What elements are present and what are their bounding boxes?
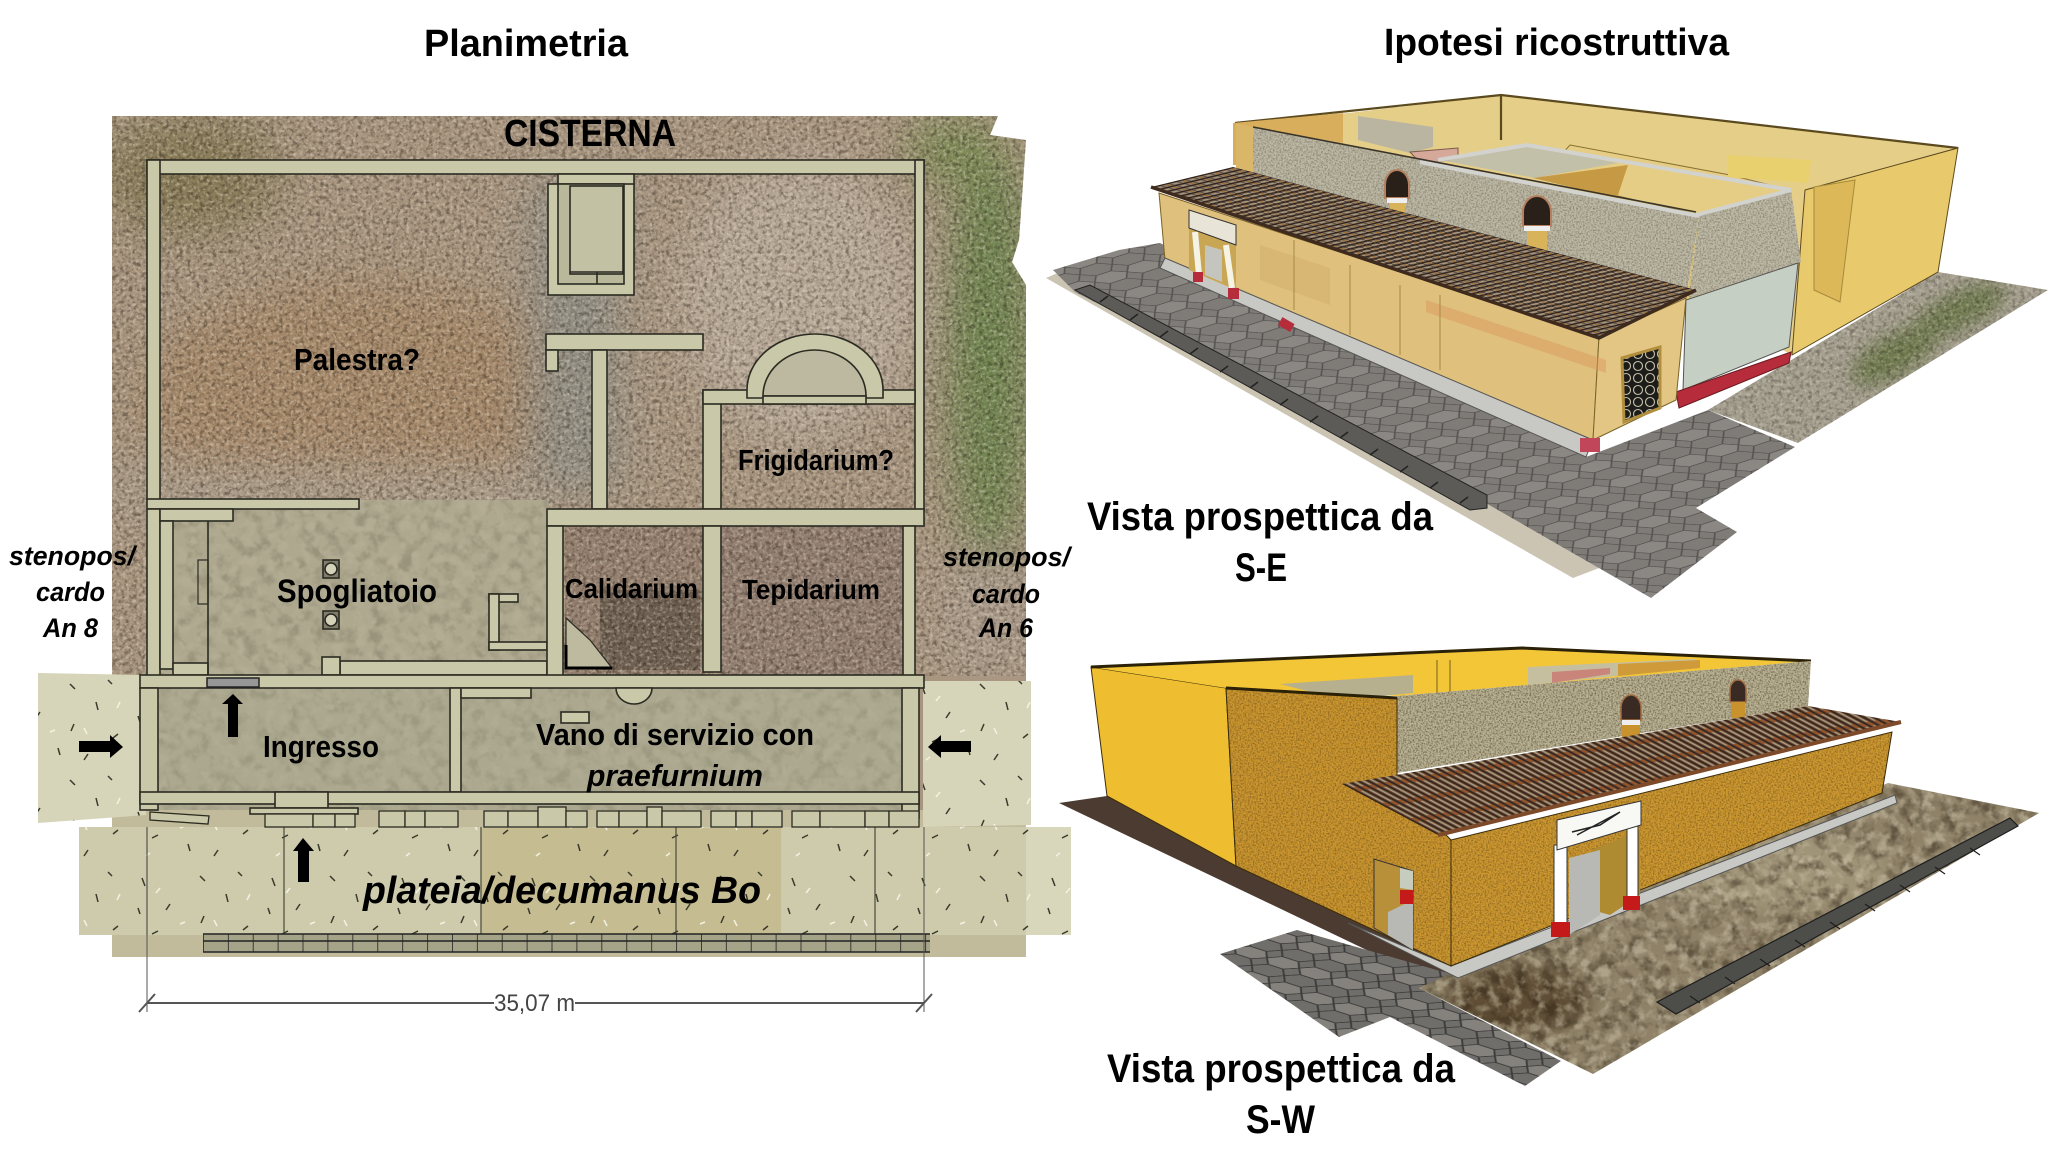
- label: Ingresso: Ingresso: [263, 729, 379, 764]
- ground photo: [1700, 270, 2048, 445]
- label: stenopos An 6: [943, 542, 1072, 643]
- label: Frigidarium: Frigidarium?: [738, 445, 894, 477]
- label: Vano di servizio: [536, 717, 814, 793]
- caption: view S-W: Vista prospettica da: [1107, 1047, 1456, 1091]
- windows: [1385, 170, 1551, 255]
- corner red base: [1580, 438, 1600, 452]
- frigidarium walls and apse: [703, 334, 915, 509]
- lattice window: [1622, 347, 1660, 422]
- central walls: [147, 499, 924, 679]
- washed lower rooms: [159, 689, 901, 810]
- grey stone walls: [1236, 123, 1801, 298]
- windows: [1621, 680, 1746, 737]
- label: stenopos An 8: stenopos/: [9, 541, 137, 571]
- main road paving: [1053, 243, 1590, 483]
- label: Calidarium: Calidarium: [565, 573, 698, 604]
- label: stenopos An 8: An 8: [42, 613, 98, 643]
- red plinth: [1676, 352, 1791, 408]
- base strip: [1160, 258, 1593, 457]
- rear stone wall: [1280, 675, 1413, 700]
- stenopos road right: [923, 681, 1031, 827]
- kerb: [1657, 818, 2018, 1014]
- threshold blocks: [150, 807, 919, 827]
- arrow: from right stenopos: [928, 735, 971, 758]
- kerb row: [203, 934, 930, 952]
- dimension label: 35,07 m: [494, 990, 575, 1017]
- lower block walls: [140, 675, 924, 818]
- road kerb: [1075, 285, 1487, 510]
- dark doorway threshold: [207, 678, 259, 687]
- tiled roof: [1151, 167, 1696, 338]
- label: stenopos An 6: An 6: [978, 613, 1034, 643]
- label: Vano di servizio: praefurnium: [586, 758, 763, 793]
- portal: [1189, 210, 1295, 332]
- label: CISTERNA: CISTERNA: [504, 113, 676, 155]
- dimension line: [139, 827, 932, 1012]
- spogliatoio pillars: [323, 560, 339, 629]
- plateia road: [79, 827, 1071, 935]
- building walls: [140, 160, 924, 827]
- label: Spogliatoio: Spogliatoio: [277, 573, 437, 609]
- arrow: from left stenopos: [79, 735, 123, 758]
- yellow interior wall: [1091, 648, 1811, 696]
- base strip: [1348, 795, 1897, 978]
- calidarium wall fragment: [566, 618, 612, 668]
- yellow outer wall: [1091, 667, 1236, 866]
- stenopos road left: [38, 673, 146, 823]
- arrow: entrance from plateia: [293, 838, 314, 882]
- side road paving: [1451, 410, 1795, 598]
- caption: view S-W: S-W: [1246, 1098, 1315, 1142]
- panel: site plan: [9, 113, 1072, 1017]
- side door: [1374, 859, 1413, 950]
- caption: view S-E: S-E: [1235, 546, 1287, 590]
- inner rooms: [1528, 659, 1700, 685]
- panel: perspective view from S-W: [1059, 648, 2045, 1086]
- heading: Ipotesi ricostruttiva: Ipotesi ricostruttiva: [1384, 22, 1730, 64]
- glass lower wall: [1683, 263, 1798, 390]
- dark earth strip: [1059, 796, 1458, 985]
- label: stenopos An 6: cardo: [972, 579, 1040, 609]
- facade yellow wall: [1159, 193, 1686, 440]
- washed spogliatoio: [147, 500, 547, 675]
- pavement shadow: [1046, 272, 1620, 578]
- aerial photo background: [100, 115, 1032, 957]
- label: Palestra: Palestra?: [294, 342, 420, 377]
- grey paving: [1220, 930, 1561, 1086]
- road photo texture: [1415, 780, 2045, 1080]
- label: plateia: plateia/decumanus Bo: [362, 870, 761, 912]
- label: stenopos An 8: cardo: [36, 577, 105, 607]
- caption: view S-E: [1087, 495, 1434, 590]
- label: Vano di servizio: Vano di servizio con: [536, 717, 814, 752]
- label: Tepidarium: Tepidarium: [742, 574, 880, 605]
- tiled roof: [1342, 706, 1901, 835]
- caption: view S-W: [1107, 1047, 1456, 1142]
- interior back walls: [1233, 95, 1958, 355]
- arrow: entrance from inner court: [222, 694, 243, 737]
- stone wall: [1397, 661, 1811, 773]
- caption: view S-E: Vista prospettica da: [1087, 495, 1434, 539]
- cistern basin: [548, 174, 634, 295]
- portal: [1551, 801, 1641, 937]
- panel: perspective view from S-E: [1046, 95, 2048, 598]
- label: stenopos An 6: stenopos/: [943, 542, 1072, 572]
- ochre corner walls: [1226, 688, 1892, 966]
- T-shaped wall: [546, 334, 703, 509]
- label: stenopos An 8: [9, 541, 137, 643]
- photo grain: [112, 116, 1026, 676]
- heading: Planimetria: Planimetria: [424, 23, 629, 65]
